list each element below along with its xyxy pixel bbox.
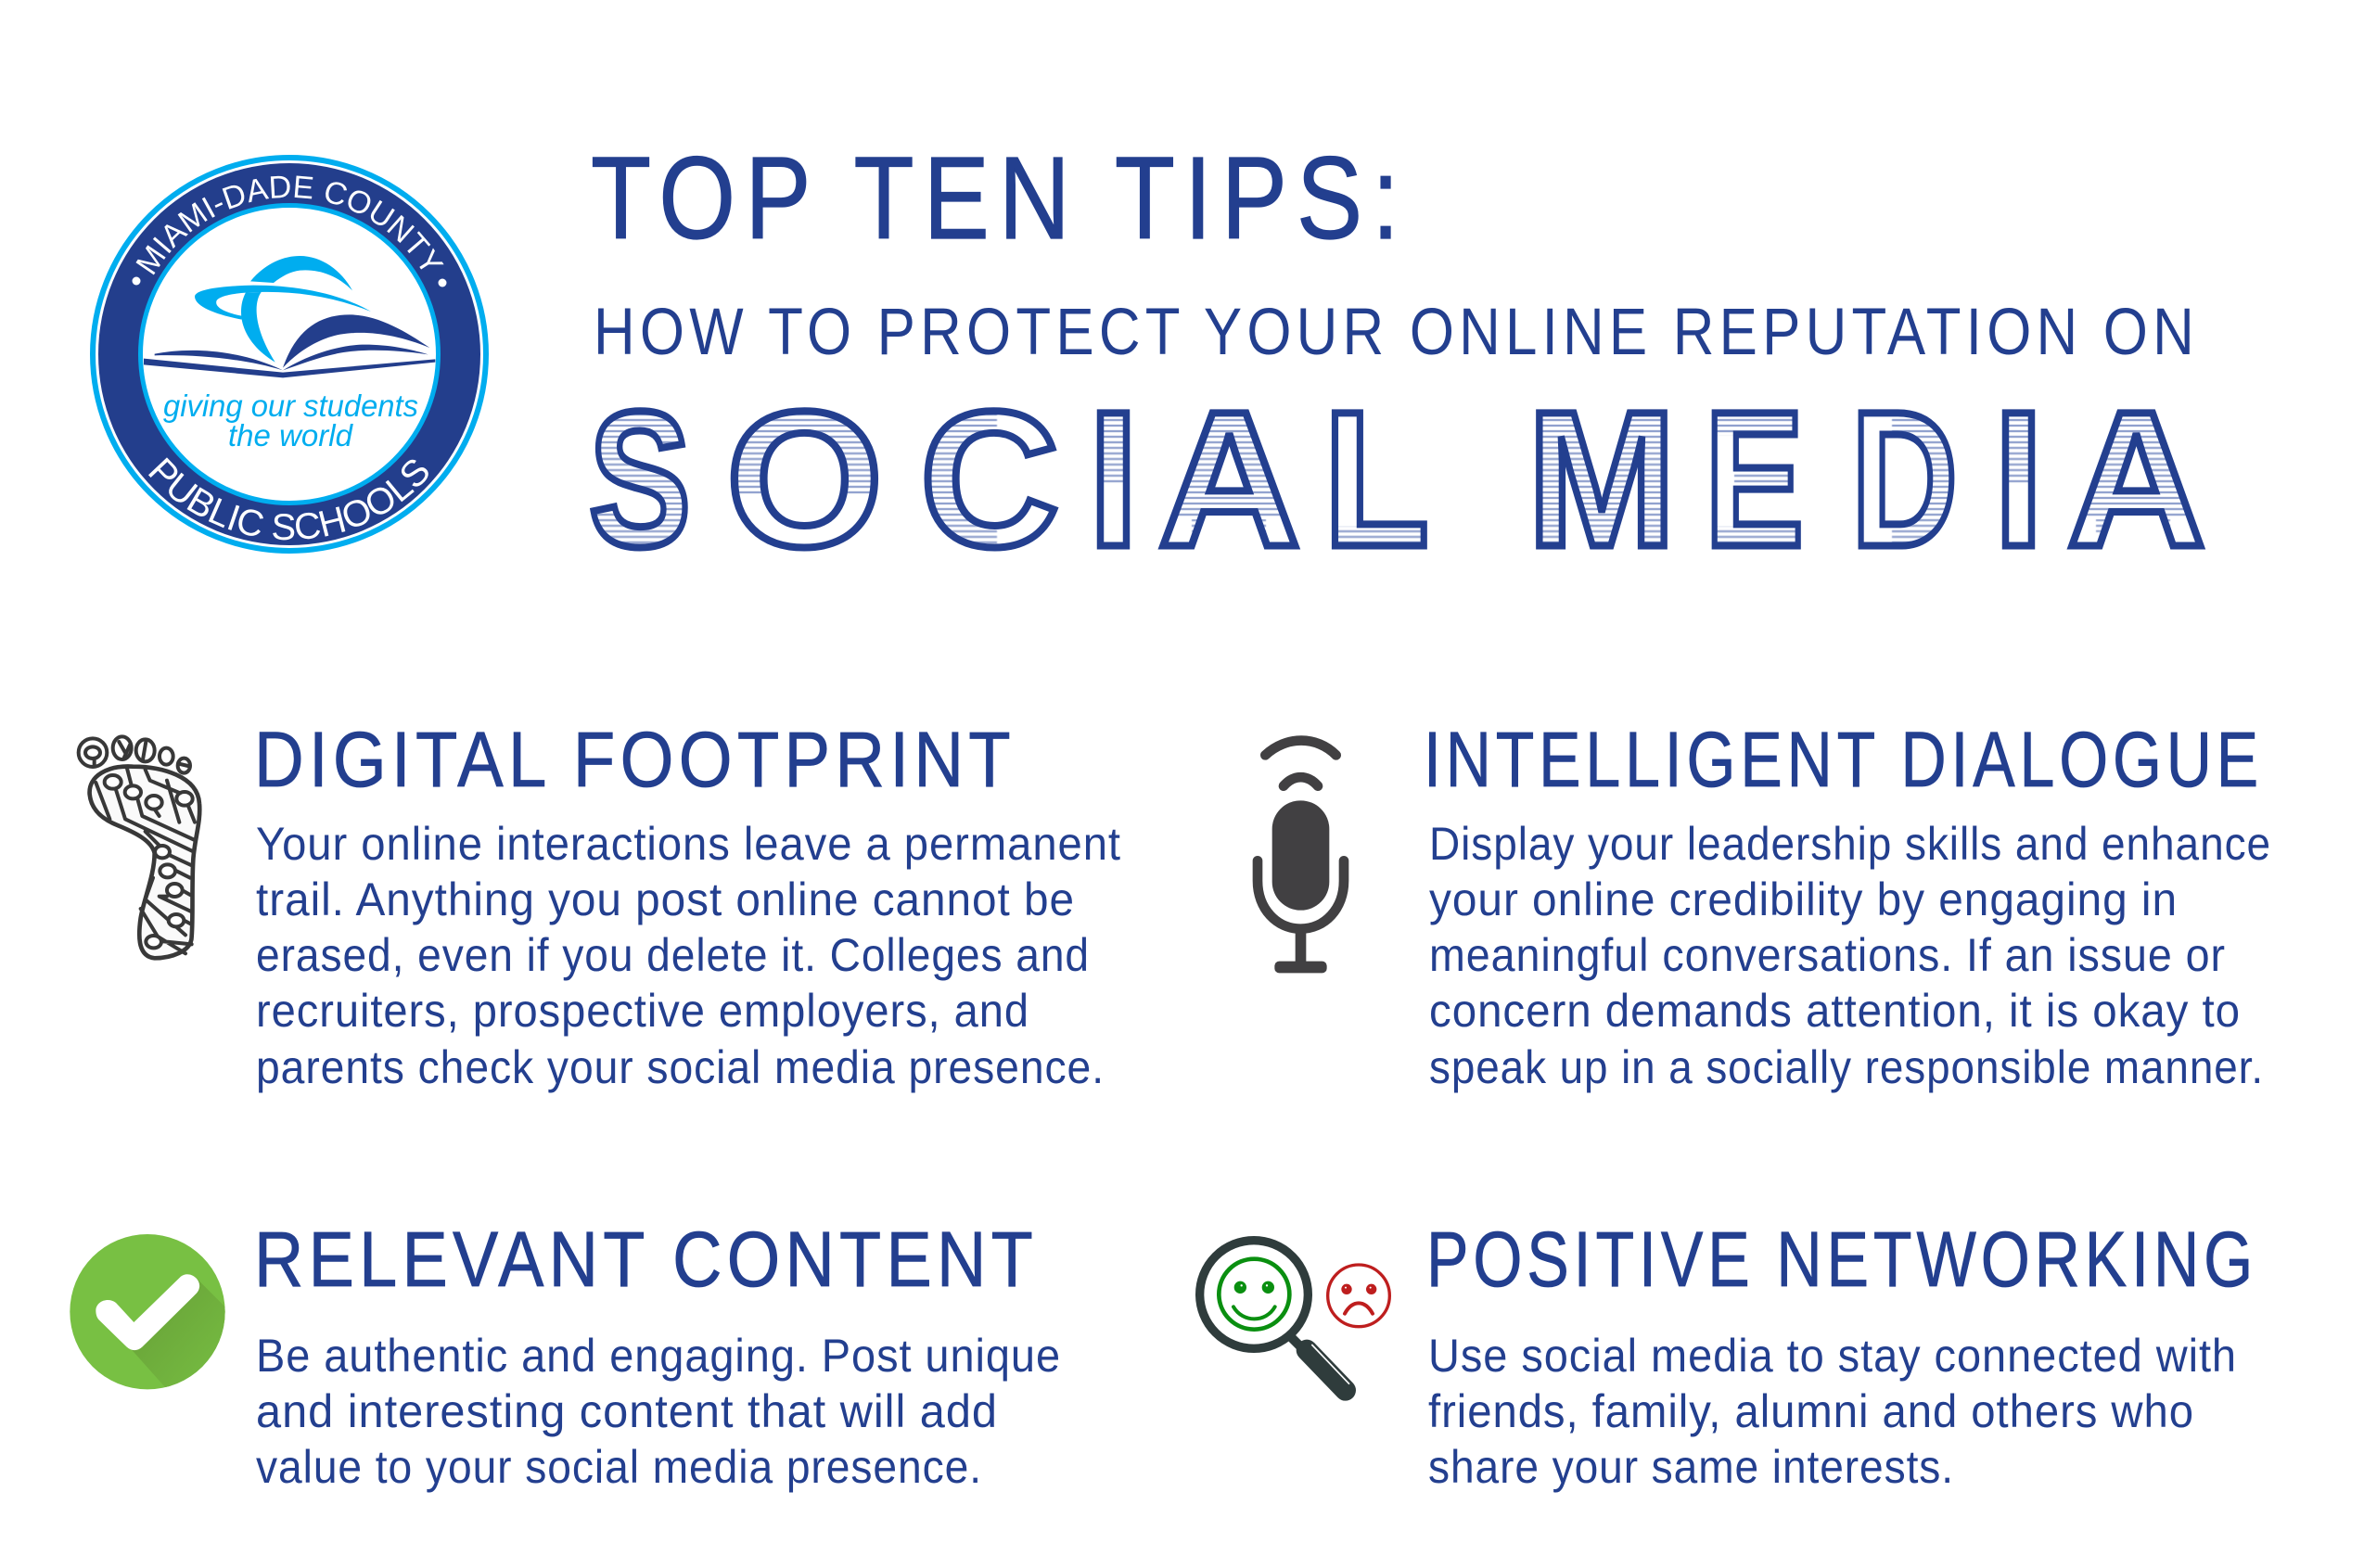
logo: Miami-Dade County Public Schools seal: the world xyxy=(228,418,354,453)
logo: Miami-Dade County Public Schools seal: MIAMI-DADE COUNTY xyxy=(135,176,443,274)
title: social media outlined hatched letters: C xyxy=(920,373,1059,588)
logo: Miami-Dade County Public Schools seal: PUBLIC SCHOOLS xyxy=(148,457,428,540)
title: social media outlined hatched letters xyxy=(589,373,2205,588)
title: social media outlined hatched letters: A xyxy=(1158,373,1300,588)
title: social media outlined hatched letters: I xyxy=(1994,373,2044,588)
title: social media outlined hatched letters: E xyxy=(1705,373,1804,588)
icon: magnifier with smiley and frowny faces xyxy=(1200,1241,1389,1390)
title: social media outlined hatched letters: D xyxy=(1851,373,1958,588)
panel: relevant content xyxy=(70,1216,1061,1493)
panel: digital footprint xyxy=(79,716,1121,1093)
title: top ten tips: TOP TEN TIPS: xyxy=(591,133,1409,263)
panel: intelligent dialogue xyxy=(1258,716,2271,1093)
body text: value to your social media presence. xyxy=(256,1441,982,1493)
title: social media outlined hatched letters: I xyxy=(1089,373,1139,588)
title: social media outlined hatched letters: O xyxy=(726,373,883,588)
icon: circuit footprint xyxy=(79,736,199,958)
body text: meaningful conversations. If an issue or xyxy=(1429,929,2226,981)
heading: DIGITAL FOOTPRINT xyxy=(254,716,1016,803)
body text: Use social media to stay connected with xyxy=(1428,1330,2237,1382)
icon: microphone xyxy=(1258,741,1344,973)
title: social media outlined hatched letters: S xyxy=(589,373,691,588)
body text: parents check your social media presence. xyxy=(256,1041,1105,1093)
title: social media outlined hatched letters: M xyxy=(1527,373,1676,588)
body text: trail. Anything you post online cannot be xyxy=(256,873,1075,925)
title: social media outlined hatched letters: A xyxy=(2067,373,2205,588)
body text: Be authentic and engaging. Post unique xyxy=(256,1330,1061,1382)
body text: recruiters, prospective employers, and xyxy=(256,985,1029,1037)
body text: your online credibility by engaging in xyxy=(1429,873,2178,925)
body text: Your online interactions leave a permanent xyxy=(256,818,1121,870)
logo: Miami-Dade County Public Schools seal xyxy=(90,155,489,554)
panel: positive networking xyxy=(1200,1216,2257,1493)
body text: share your same interests. xyxy=(1428,1441,1954,1493)
body text: concern demands attention, it is okay to xyxy=(1429,985,2241,1037)
body text: Display your leadership skills and enhance xyxy=(1429,818,2271,870)
logo: Miami-Dade County Public Schools seal: giving our students xyxy=(163,389,418,423)
body text: and interesting content that will add xyxy=(256,1385,998,1437)
body text: speak up in a socially responsible manner. xyxy=(1429,1041,2264,1093)
body text: friends, family, alumni and others who xyxy=(1428,1385,2194,1437)
body text xyxy=(256,1330,1061,1493)
body text xyxy=(256,818,1121,1093)
body text: erased, even if you delete it. Colleges and xyxy=(256,929,1090,981)
body text xyxy=(1428,1330,2237,1493)
heading: RELEVANT CONTENT xyxy=(254,1216,1038,1303)
body text xyxy=(1429,818,2271,1093)
icon: green check mark xyxy=(70,1234,225,1389)
title: social media outlined hatched letters: L xyxy=(1323,373,1429,588)
